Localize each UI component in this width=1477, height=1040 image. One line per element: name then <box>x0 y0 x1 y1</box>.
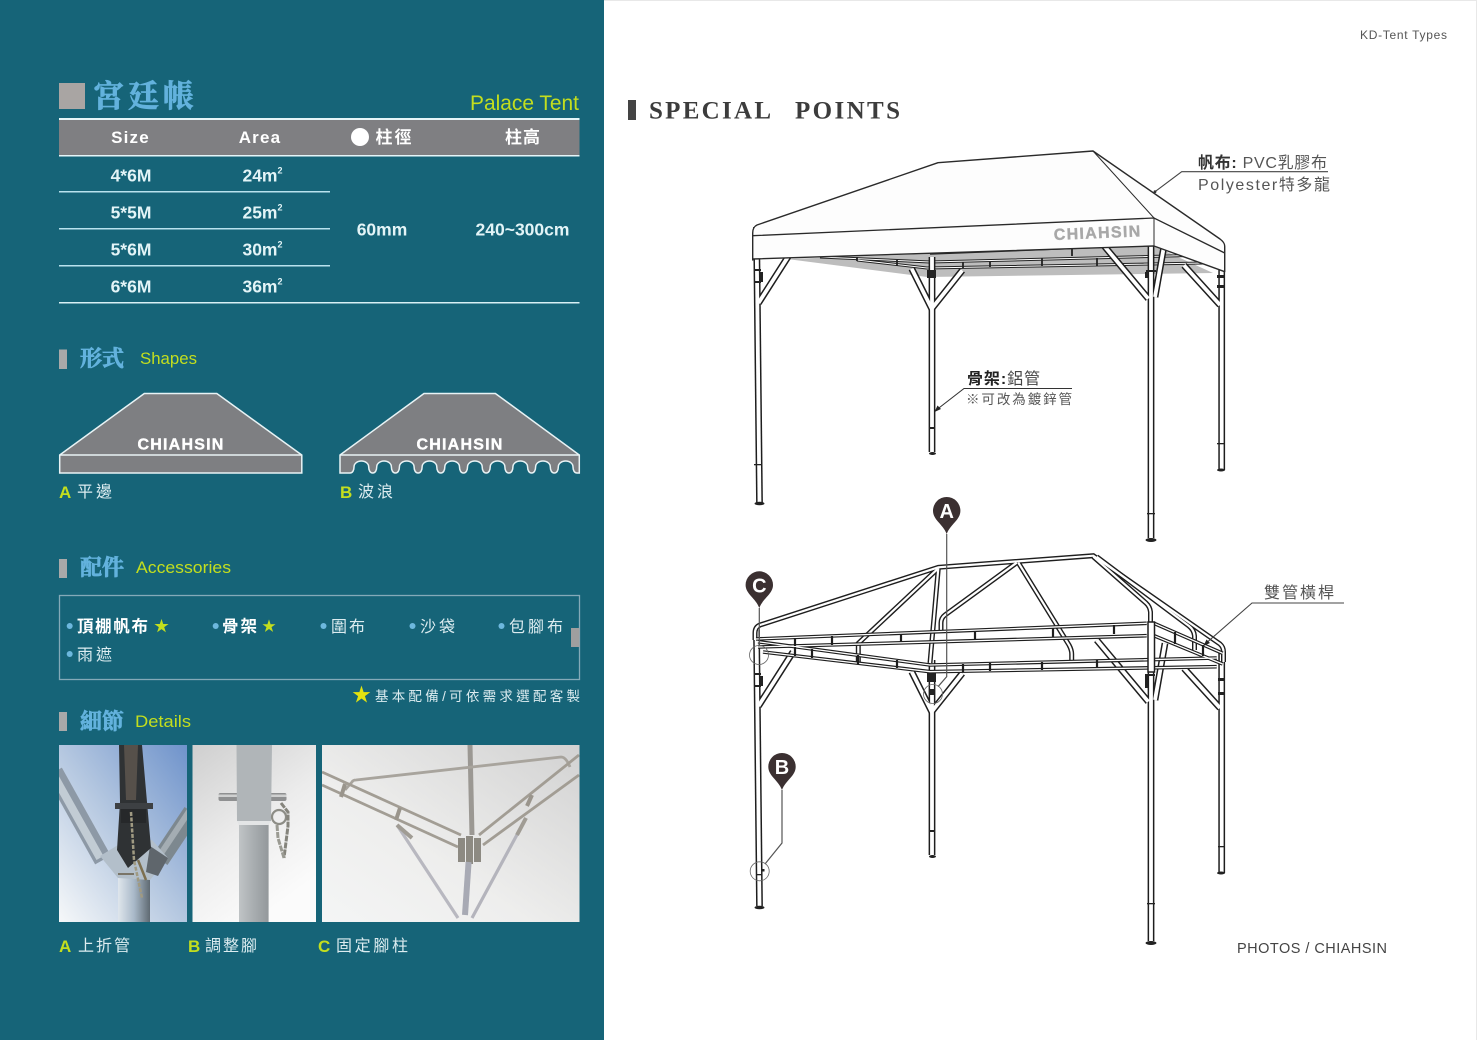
table: size and area specification: Size <box>111 128 150 147</box>
table: size and area specification: Area <box>239 128 281 147</box>
panel: left teal spec panel <box>0 0 604 1040</box>
heading: shapes: Shapes <box>140 349 197 368</box>
table: size and area specification: 36m <box>242 276 278 296</box>
panel: accessories list: ★ <box>154 618 169 635</box>
heading: accessories <box>59 555 231 580</box>
table: size and area specification: 柱徑 <box>376 128 412 147</box>
marker: C <box>746 571 773 664</box>
panel: accessories list: 頂棚帆布 <box>77 616 148 636</box>
callout: frame material: ※可改為鍍鋅管 <box>966 391 1072 407</box>
panel: accessories list: 雨遮 <box>77 646 112 664</box>
captions: detail photos: C <box>318 937 330 956</box>
callout: frame material: 骨架:鋁管 <box>967 369 1040 388</box>
table: size and area specification: 2 <box>278 240 283 250</box>
captions: detail photos: 固定腳柱 <box>336 937 408 955</box>
table: size and area specification: 4*6M <box>111 166 151 186</box>
table: size and area specification: 24m <box>242 166 278 186</box>
legs and braces <box>756 622 1222 941</box>
table: size and area specification: 60mm <box>357 220 407 240</box>
canopy fabric <box>753 151 1225 272</box>
panel: accessories list: ★ <box>262 618 276 634</box>
table: size and area specification: 30m <box>242 240 278 260</box>
canopy brand text: CHIAHSIN <box>1053 223 1142 244</box>
marker: B: B <box>775 757 789 779</box>
title: palace tent <box>59 79 579 115</box>
marker: B <box>750 753 796 881</box>
panel: accessories list <box>60 596 580 680</box>
corner post at front right <box>1148 622 1154 672</box>
captions: detail photos <box>59 936 408 956</box>
legs and braces <box>756 219 1222 538</box>
illustration: covered tent <box>753 151 1225 542</box>
header tag: KD-Tent Types: KD-Tent Types <box>1360 28 1447 42</box>
captions: detail photos: 上折管 <box>78 936 130 955</box>
feet and fittings <box>754 269 1225 542</box>
marker: A: A <box>939 501 954 523</box>
panel: accessories list: 骨架 <box>222 617 257 636</box>
callout: canopy fabric <box>1154 153 1330 194</box>
callout: frame material <box>934 369 1072 412</box>
frame rails below canopy <box>820 247 1210 268</box>
callout: canopy fabric: Polyester特多龍 <box>1198 176 1330 194</box>
table: size and area specification: 5*6M <box>111 240 151 260</box>
photo credit: PHOTOS / CHIAHSIN <box>1237 941 1387 957</box>
table: size and area specification: 柱高 <box>505 127 540 147</box>
note: basic equipment legend: ★ <box>352 685 371 706</box>
marker: A <box>924 497 960 704</box>
heading: shapes <box>59 346 197 371</box>
captions: detail photos: 調整腳 <box>205 937 257 955</box>
roof frame <box>755 556 1224 663</box>
panel: accessories list: 圍布 <box>331 618 365 636</box>
table: size and area specification: 240~300cm <box>476 220 569 240</box>
note: basic equipment legend: 基本配備/可依需求選配客製 <box>375 688 580 704</box>
panel: accessories list: 沙袋 <box>420 618 455 636</box>
diagram: wavy edge tent shape <box>340 394 579 502</box>
photo: upper folding pipe <box>59 745 187 922</box>
page edge <box>604 0 1476 1040</box>
underside shadow <box>787 246 1213 277</box>
captions: detail photos: A <box>59 937 71 956</box>
double eave rails <box>756 623 1223 672</box>
heading: shapes: 形式 <box>80 346 124 371</box>
diagram: flat edge tent shape: A <box>59 483 71 502</box>
table: size and area specification: 2 <box>278 166 283 176</box>
callout: canopy fabric: 帆布: PVC乳膠布 <box>1198 153 1327 172</box>
note: basic equipment legend <box>352 685 580 706</box>
diagram: flat edge tent shape: 平邊 <box>77 483 112 501</box>
rail rungs <box>795 625 1203 672</box>
table: size and area specification: 5*5M <box>111 202 151 222</box>
heading: accessories: 配件 <box>80 555 124 580</box>
photo: fixed leg post <box>322 745 580 922</box>
marker: C: C <box>752 576 767 598</box>
title: palace tent: Palace Tent <box>470 92 579 115</box>
panel: accessories list: 包腳布 <box>509 618 563 636</box>
diagram: wavy edge tent shape: B <box>340 483 352 502</box>
callout: double crossbar: 雙管橫桿 <box>1264 583 1334 602</box>
illustration: bare tent frame <box>754 556 1225 945</box>
title: palace tent: 宮廷帳 <box>93 79 194 114</box>
diagram: flat edge tent shape <box>59 394 302 502</box>
table: size and area specification: 25m <box>242 202 278 222</box>
table: size and area specification: 2 <box>278 202 283 212</box>
captions: detail photos: B <box>188 937 200 956</box>
feet and fittings <box>754 673 1225 945</box>
heading: details: Details <box>135 712 191 731</box>
heading: details: 細節 <box>80 709 124 734</box>
heading: special points <box>628 98 900 124</box>
diagram: wavy edge tent shape: CHIAHSIN <box>417 436 503 454</box>
heading: details <box>59 709 191 734</box>
table: size and area specification: 2 <box>278 276 283 286</box>
photo: adjustable leg <box>192 745 316 922</box>
heading: special points: POINTS <box>795 98 900 124</box>
diagram: flat edge tent shape: CHIAHSIN <box>138 436 224 454</box>
diagram: wavy edge tent shape: 波浪 <box>358 483 393 501</box>
heading: special points: SPECIAL <box>649 98 771 124</box>
heading: accessories: Accessories <box>136 558 231 577</box>
table: size and area specification <box>59 118 580 304</box>
table: size and area specification: 6*6M <box>111 276 151 296</box>
callout: double crossbar <box>1204 583 1344 646</box>
